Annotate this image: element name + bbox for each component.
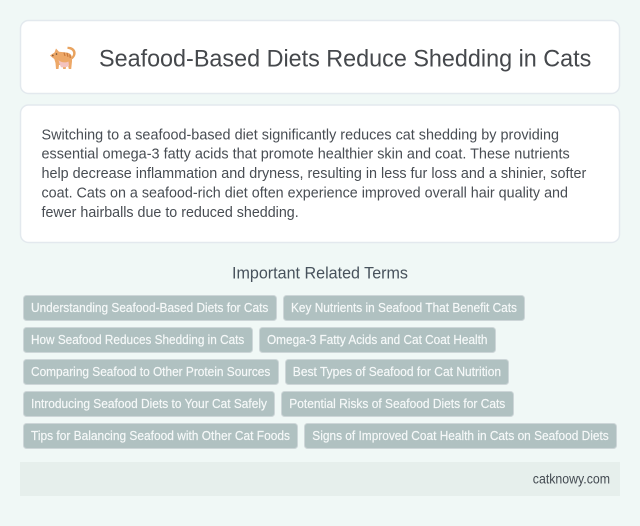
tag (24, 424, 298, 448)
tag (260, 328, 496, 352)
tag: Omega-3 Fatty Acids and Cat Coat Health (267, 333, 488, 347)
tag: How Seafood Reduces Shedding in Cats (31, 333, 244, 347)
tag: Comparing Seafood to Other Protein Sources (31, 365, 270, 379)
tag (284, 296, 524, 320)
tag (24, 360, 278, 384)
panel: description card (20, 105, 620, 242)
text block: description: fewer hairballs due to reduced shedding. (42, 205, 299, 221)
tag: Signs of Improved Coat Health in Cats on Seafood Diets (312, 429, 609, 443)
tag: Potential Risks of Seafood Diets for Cats (289, 397, 505, 411)
tag: Tips for Balancing Seafood with Other Cat Foods (31, 429, 290, 443)
footer domain text: catknowy.com (533, 471, 610, 486)
tag (304, 424, 616, 448)
text block: description: coat. Cats on a seafood-rich diet often experience improved overall hair quality and (42, 186, 568, 202)
tag (286, 360, 508, 384)
title: Seafood-Based Diets Reduce Shedding in Cats (99, 46, 591, 73)
text block: description: Switching to a seafood-based diet significantly reduces cat shedding by providing (42, 127, 559, 143)
text block: description: essential omega-3 fatty acids that promote healthier skin and coat. These nutrients (42, 147, 570, 163)
footer (20, 462, 620, 496)
tag: Introducing Seafood Diets to Your Cat Safely (31, 397, 268, 411)
tag: Understanding Seafood-Based Diets for Cats (31, 301, 268, 315)
panel: related term tags (24, 296, 616, 448)
icon: cat (50, 47, 76, 69)
tag (24, 296, 276, 320)
text block: description (42, 127, 586, 221)
tag (24, 392, 274, 416)
tag (24, 328, 252, 352)
heading: related terms: Important Related Terms (232, 264, 408, 282)
tag (282, 392, 514, 416)
text block: description: help decrease inflammation and dryness, resulting in less fur loss and a shinier, softer (42, 166, 586, 182)
tag: Best Types of Seafood for Cat Nutrition (293, 365, 501, 379)
tag: Key Nutrients in Seafood That Benefit Cats (291, 301, 517, 315)
panel: title card (20, 20, 620, 94)
